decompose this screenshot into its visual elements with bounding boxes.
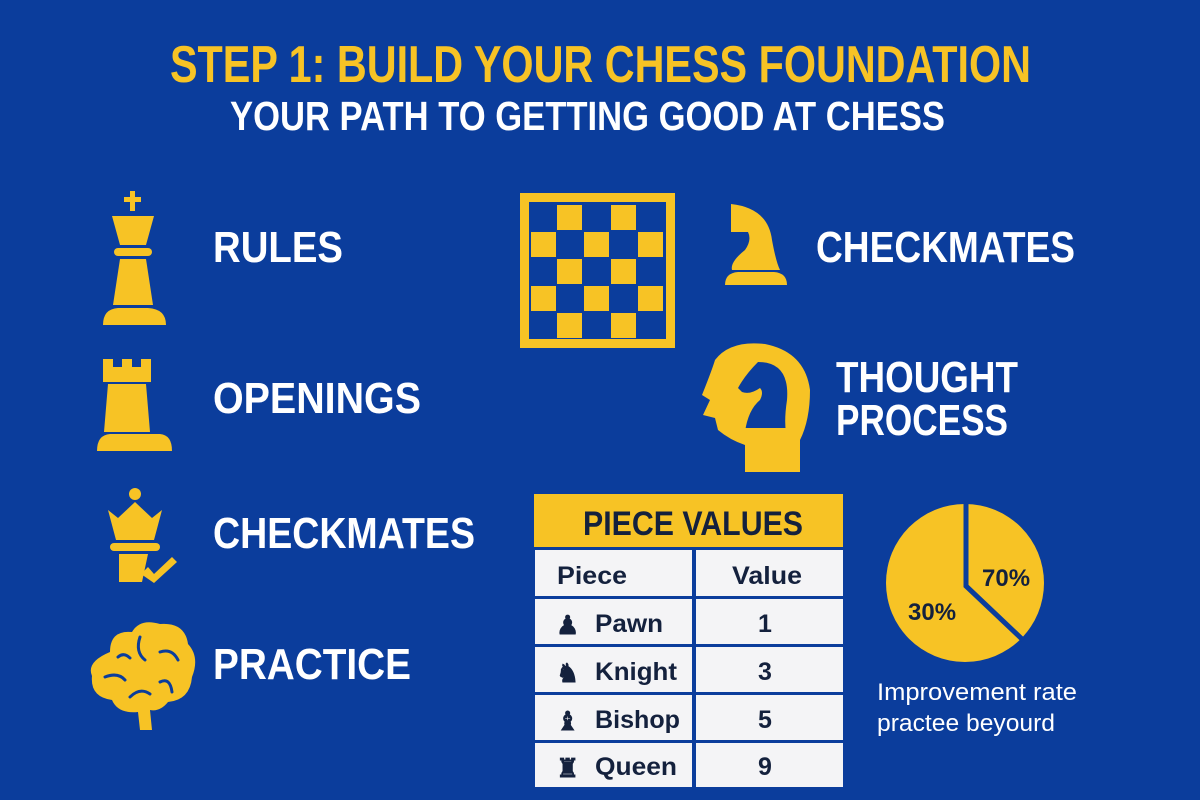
icon: knight xyxy=(725,204,787,285)
table: piece values xyxy=(533,493,844,788)
subtitle: YOUR PATH TO GETTING GOOD AT CHESS xyxy=(230,93,945,139)
icon: chessboard xyxy=(520,193,675,348)
table: piece values: ♜ xyxy=(556,753,579,783)
label: thought process xyxy=(836,353,1018,445)
pie chart: 30% xyxy=(908,599,956,626)
table: piece values: 3 xyxy=(758,658,772,686)
table: piece values: 9 xyxy=(758,753,772,781)
table: piece values: Knight xyxy=(595,658,678,686)
label: openings: OPENINGS xyxy=(213,374,421,423)
label: checkmates right: CHECKMATES xyxy=(816,223,1075,272)
icon: rook xyxy=(97,359,172,451)
pie chart xyxy=(886,504,1044,662)
icon: king xyxy=(103,191,166,325)
caption xyxy=(877,679,1077,737)
icon: brain xyxy=(91,622,195,730)
table: piece values: 5 xyxy=(758,706,772,734)
table: piece values: Piece xyxy=(557,562,627,590)
pie chart: 70% xyxy=(982,565,1030,592)
label: thought process: PROCESS xyxy=(836,396,1008,445)
table: piece values: Queen xyxy=(595,753,677,781)
label: rules: RULES xyxy=(213,223,343,272)
table: piece values: 1 xyxy=(758,610,772,638)
table: piece values: ♞ xyxy=(556,658,579,688)
table: piece values: ♝ xyxy=(556,706,579,736)
caption: Improvement rate xyxy=(877,679,1077,706)
table: piece values: PIECE VALUES xyxy=(583,505,803,543)
label: practice: PRACTICE xyxy=(213,640,411,689)
table: piece values: ♟ xyxy=(556,610,579,640)
table: piece values: Bishop xyxy=(595,706,680,734)
table: piece values: Value xyxy=(732,562,802,590)
icon: head with knight xyxy=(702,343,810,472)
label: thought process: THOUGHT xyxy=(836,353,1018,402)
label: checkmates left: CHECKMATES xyxy=(213,509,475,558)
icon: queen with check xyxy=(108,488,177,583)
caption: practee beyourd xyxy=(877,710,1055,737)
table: piece values: Pawn xyxy=(595,610,663,638)
